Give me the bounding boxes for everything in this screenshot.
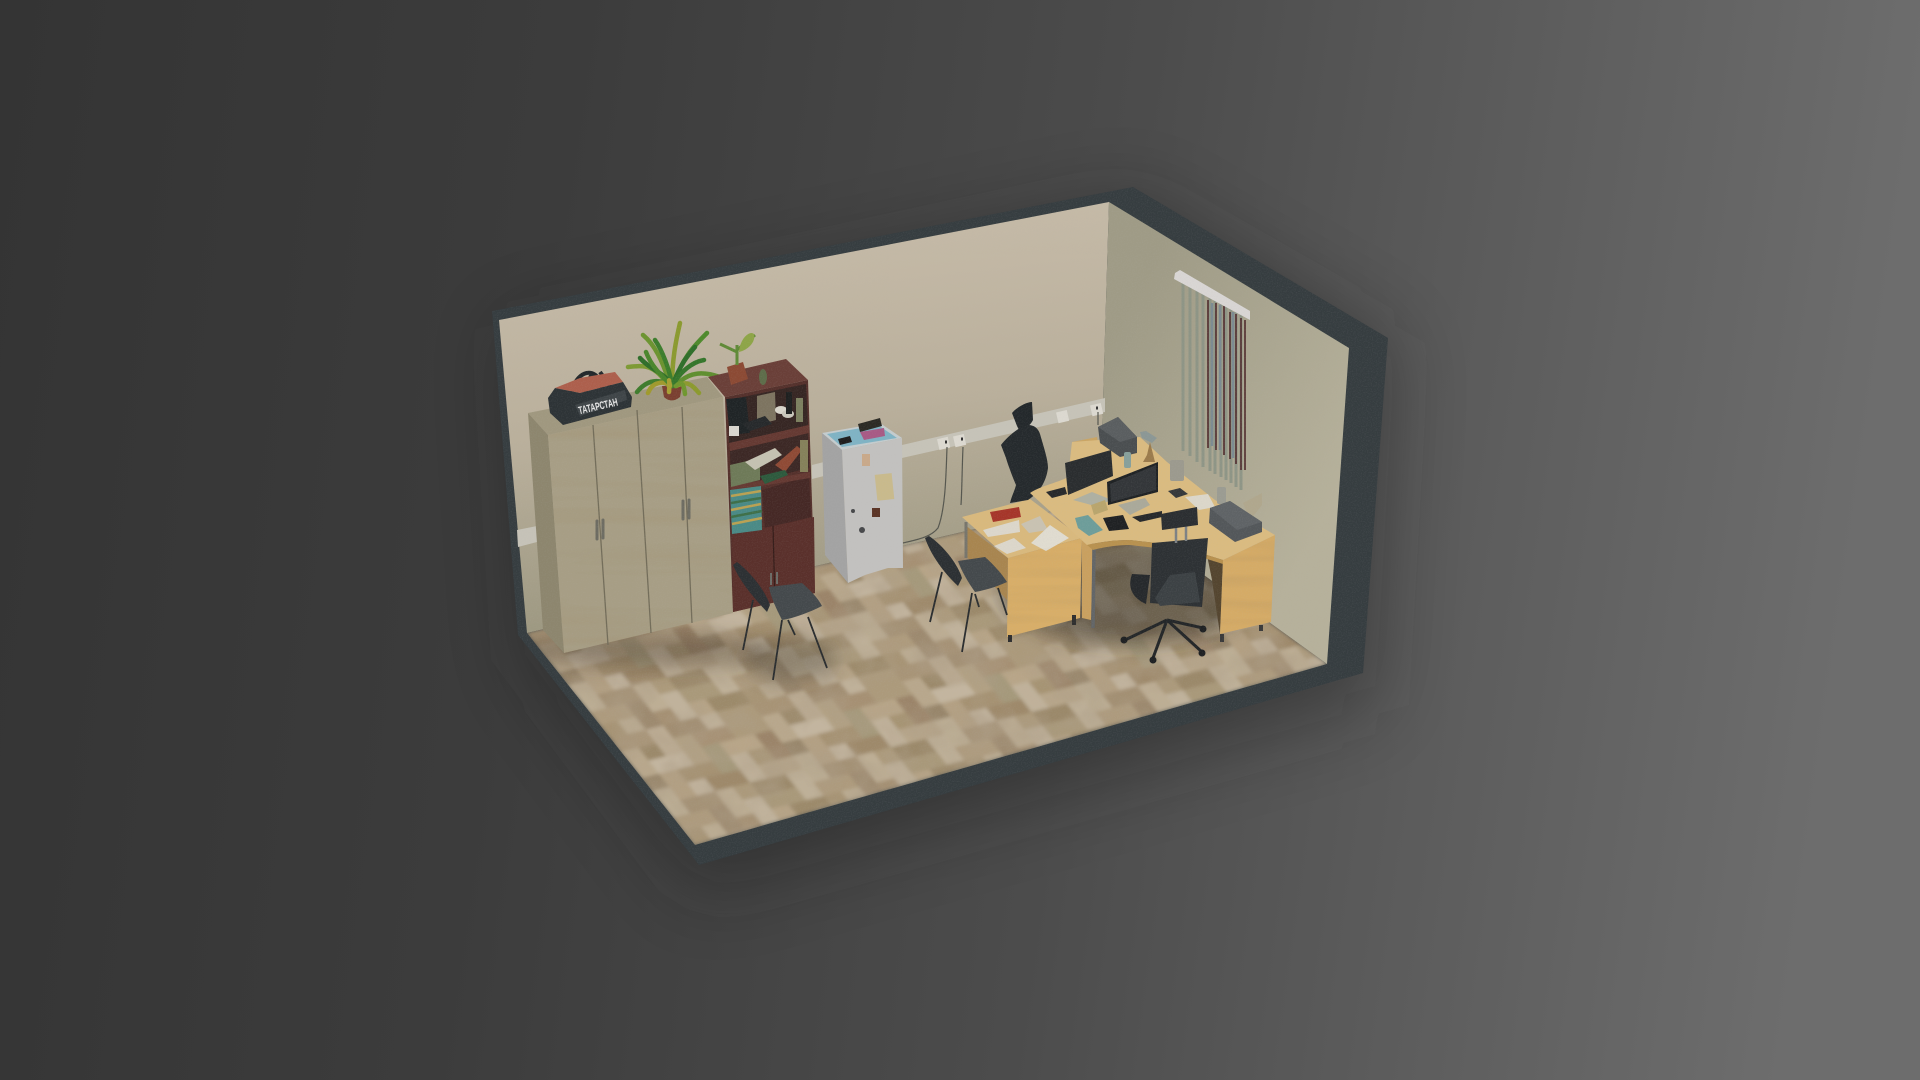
items on cabinet top: [838, 418, 885, 445]
room drop shadow: [505, 195, 1395, 895]
plant: small potted on bookcase: [720, 333, 755, 385]
corner desk: [1030, 437, 1275, 642]
teal book: [1075, 515, 1103, 536]
calculator: [1168, 488, 1188, 498]
small desk: [962, 499, 1082, 642]
pen holder: [1091, 500, 1108, 515]
telephone: [1103, 515, 1129, 531]
wardrobe: [528, 377, 735, 655]
white cabinet: [822, 418, 903, 583]
swivel office chair: [1120, 507, 1208, 664]
visitor chair left: [733, 562, 827, 680]
plant: large on wardrobe: [628, 323, 720, 400]
desk lamp: [1140, 431, 1157, 462]
sheet of paper right: [1185, 494, 1215, 510]
bottle right: [1217, 487, 1226, 504]
fridge magnets: [851, 454, 894, 533]
room shell: [492, 187, 1388, 865]
mug: [1170, 460, 1184, 481]
monitor front: [1107, 462, 1158, 515]
wall cable trunking: [517, 398, 1105, 547]
floor: [510, 495, 1335, 850]
bag with label: ТАТАРСТАН: [577, 397, 619, 417]
papers and book on small desk: [983, 507, 1069, 554]
monitor back: [1046, 450, 1113, 506]
desk equipment: [1046, 417, 1262, 542]
keyboard: [1132, 511, 1162, 522]
printer back: [1098, 417, 1137, 457]
right wall: [1100, 202, 1349, 664]
office chair with headrest behind desk: [1001, 402, 1048, 503]
back wall: [499, 202, 1109, 633]
water bottle: [1124, 452, 1131, 468]
film grain overlay: [490, 185, 1390, 870]
printer front: [1209, 493, 1262, 542]
window blinds: [1174, 270, 1250, 490]
bookcase: [708, 333, 815, 612]
visitor chair right: [925, 536, 1007, 652]
bag with label: [548, 372, 632, 425]
books and objects on shelves: [726, 392, 808, 534]
